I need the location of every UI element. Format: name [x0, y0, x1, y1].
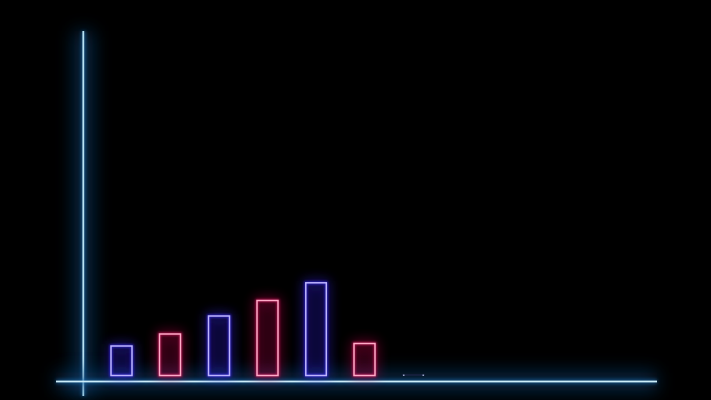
bar 3: blue — [208, 316, 230, 376]
bar 2: red — [160, 334, 180, 376]
bar 6: red — [354, 344, 375, 376]
bar 5: blue — [306, 283, 326, 376]
bar 1: blue — [111, 346, 132, 376]
bar 7: emerging sliver — [402, 374, 425, 376]
bar 4: red — [257, 300, 278, 376]
y axis — [74, 31, 93, 396]
x axis — [56, 372, 657, 391]
